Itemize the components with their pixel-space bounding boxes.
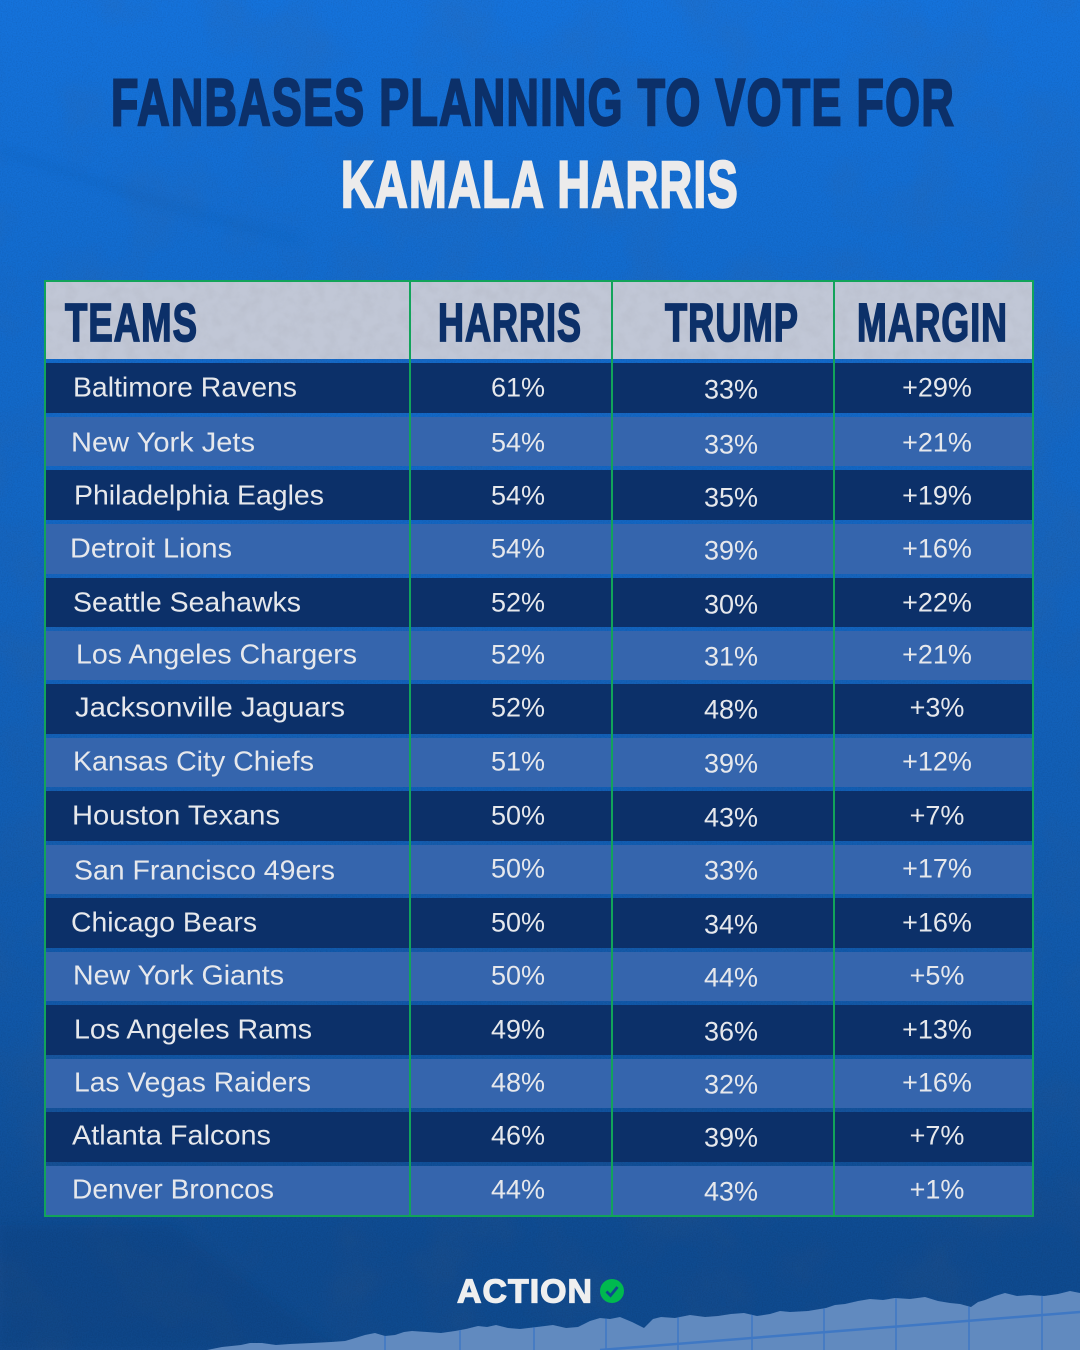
- row: Kansas City Chiefs: +12%: [902, 746, 972, 776]
- row: Las Vegas Raiders: 32%: [704, 1070, 758, 1100]
- row: Houston Texans: [46, 791, 1032, 841]
- row: Philadelphia Eagles: 54%: [491, 480, 545, 510]
- row: Atlanta Falcons: +7%: [910, 1120, 964, 1150]
- row: Baltimore Ravens: 33%: [704, 374, 758, 404]
- row: Baltimore Ravens: +29%: [902, 372, 972, 402]
- row: Philadelphia Eagles: [46, 470, 1032, 520]
- logo: Action Network: [457, 1272, 624, 1310]
- row: Houston Texans: 50%: [491, 800, 545, 830]
- row: Las Vegas Raiders: [46, 1059, 1032, 1108]
- logo wordmark: ACTION: [457, 1272, 593, 1310]
- table header row: [46, 282, 1032, 359]
- row: Las Vegas Raiders: 48%: [491, 1068, 545, 1098]
- row: Seattle Seahawks: +22%: [902, 588, 972, 618]
- table header row: TRUMP: [665, 293, 799, 353]
- row: Seattle Seahawks: [46, 578, 1032, 627]
- row: Los Angeles Chargers: +21%: [902, 640, 972, 670]
- row: Denver Broncos: +1%: [910, 1174, 964, 1204]
- title: [111, 65, 955, 221]
- row: Kansas City Chiefs: 39%: [704, 748, 758, 778]
- row: San Francisco 49ers: San Francisco 49ers: [74, 854, 335, 886]
- row: Seattle Seahawks: 52%: [491, 588, 545, 618]
- row: Detroit Lions: [46, 524, 1032, 574]
- row: Atlanta Falcons: 39%: [704, 1122, 758, 1152]
- row: Atlanta Falcons: Atlanta Falcons: [72, 1120, 271, 1150]
- row: Los Angeles Chargers: Los Angeles Chargers: [76, 638, 357, 670]
- row: San Francisco 49ers: +17%: [902, 854, 972, 884]
- row: Philadelphia Eagles: +19%: [902, 480, 972, 510]
- row: Los Angeles Rams: +13%: [902, 1014, 972, 1044]
- row: Chicago Bears: 50%: [491, 908, 545, 938]
- table header row: MARGIN: [857, 293, 1008, 353]
- row: Denver Broncos: [46, 1166, 1032, 1215]
- row: Los Angeles Chargers: 31%: [704, 642, 758, 672]
- row: Chicago Bears: +16%: [902, 908, 972, 938]
- table header row: HARRIS: [438, 293, 582, 353]
- row: Los Angeles Chargers: 52%: [491, 640, 545, 670]
- row: Los Angeles Rams: 49%: [491, 1014, 545, 1044]
- row: New York Giants: +5%: [910, 960, 964, 990]
- row: Jacksonville Jaguars: +3%: [910, 692, 964, 722]
- row: Los Angeles Rams: 36%: [704, 1016, 758, 1046]
- row: Las Vegas Raiders: Las Vegas Raiders: [74, 1066, 311, 1098]
- row: San Francisco 49ers: [46, 845, 1032, 894]
- data table: [45, 281, 1033, 1216]
- row: Houston Texans: 43%: [704, 802, 758, 832]
- row: Detroit Lions: 54%: [491, 534, 545, 564]
- icon: green check badge: [600, 1279, 624, 1303]
- row: New York Jets: 54%: [491, 428, 545, 458]
- title line two: KAMALA HARRIS: [341, 147, 739, 221]
- row: Chicago Bears: [46, 898, 1032, 948]
- row: Los Angeles Rams: Los Angeles Rams: [74, 1014, 312, 1044]
- row: Kansas City Chiefs: Kansas City Chiefs: [73, 746, 314, 776]
- row: Chicago Bears: 34%: [704, 910, 758, 940]
- row: New York Jets: [46, 417, 1032, 466]
- row: Detroit Lions: +16%: [902, 534, 972, 564]
- row: Baltimore Ravens: Baltimore Ravens: [73, 372, 297, 402]
- row: Houston Texans: +7%: [910, 800, 964, 830]
- row: Baltimore Ravens: [46, 363, 1032, 413]
- row: Houston Texans: Houston Texans: [72, 800, 280, 830]
- row: Jacksonville Jaguars: [46, 684, 1032, 734]
- row: Atlanta Falcons: 46%: [491, 1120, 545, 1150]
- row: Seattle Seahawks: Seattle Seahawks: [73, 586, 301, 618]
- row: Atlanta Falcons: [46, 1112, 1032, 1162]
- row: New York Giants: New York Giants: [73, 960, 284, 990]
- row: New York Jets: +21%: [902, 428, 972, 458]
- table border and column lines: [45, 281, 1033, 1216]
- row: Philadelphia Eagles: 35%: [704, 482, 758, 512]
- row: Philadelphia Eagles: Philadelphia Eagles: [74, 480, 324, 510]
- row: Denver Broncos: 43%: [704, 1176, 758, 1206]
- row: Detroit Lions: Detroit Lions: [70, 532, 232, 564]
- table header row: TEAMS: [65, 293, 198, 353]
- row: Kansas City Chiefs: [46, 738, 1032, 787]
- row: Los Angeles Rams: [46, 1005, 1032, 1055]
- row: Kansas City Chiefs: 51%: [491, 746, 545, 776]
- row: Detroit Lions: 39%: [704, 536, 758, 566]
- row: Denver Broncos: Denver Broncos: [72, 1174, 274, 1204]
- torn graph paper: [208, 1291, 1080, 1350]
- row: San Francisco 49ers: 33%: [704, 856, 758, 886]
- row: Los Angeles Chargers: [46, 631, 1032, 680]
- row: New York Giants: 44%: [704, 962, 758, 992]
- row: Chicago Bears: Chicago Bears: [71, 906, 257, 938]
- row: Jacksonville Jaguars: 48%: [704, 694, 758, 724]
- row: Las Vegas Raiders: +16%: [902, 1068, 972, 1098]
- row: Seattle Seahawks: 30%: [704, 590, 758, 620]
- row: San Francisco 49ers: 50%: [491, 854, 545, 884]
- row: Jacksonville Jaguars: Jacksonville Jaguars: [75, 692, 345, 722]
- row: Jacksonville Jaguars: 52%: [491, 692, 545, 722]
- row: New York Giants: 50%: [491, 960, 545, 990]
- row: Denver Broncos: 44%: [491, 1174, 545, 1204]
- row: Baltimore Ravens: 61%: [491, 372, 545, 402]
- row: New York Jets: New York Jets: [71, 426, 255, 458]
- row: New York Giants: [46, 952, 1032, 1001]
- row: New York Jets: 33%: [704, 430, 758, 460]
